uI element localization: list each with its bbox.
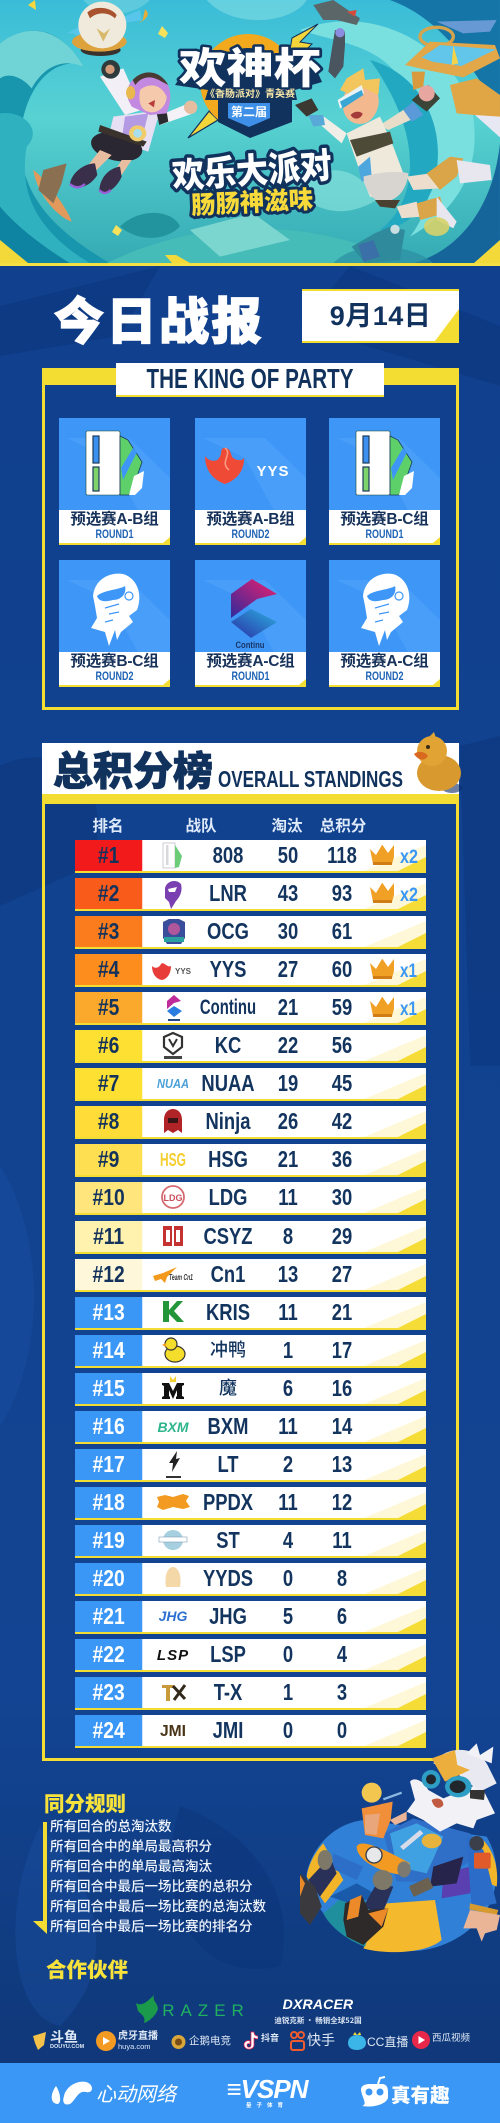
logo: YYDS	[166, 1567, 180, 1587]
sponsor: 西瓜视频: 西瓜视频	[432, 2033, 470, 2044]
row: #6 KC: 22	[278, 1032, 298, 1058]
row: #9 HSG: HSG	[208, 1146, 248, 1172]
logo: LNR	[165, 881, 182, 909]
row: #9 HSG: 21	[278, 1146, 298, 1172]
sponsor: 抖音	[244, 2032, 279, 2050]
logo: CSYZ	[163, 1226, 183, 1246]
card: 预选赛A-C组 round2	[329, 560, 440, 687]
row: #23 T-X: #23	[93, 1679, 125, 1705]
row: #3 OCG	[75, 916, 426, 949]
logo: tournament emblem: 欢神杯	[179, 35, 321, 96]
logo: tournament emblem: 第二届	[231, 103, 267, 120]
row: #21 JHG	[75, 1601, 426, 1634]
panel: overall standings frame	[42, 794, 459, 1761]
row: #13 KRIS	[75, 1297, 426, 1330]
logo: KC	[162, 1032, 184, 1059]
footer band	[0, 2063, 500, 2123]
row: #7 NUAA	[75, 1068, 426, 1101]
logo: NUAA: NUAA	[157, 1076, 189, 1091]
crown x2	[370, 883, 418, 906]
row: #2 LNR: 43	[278, 880, 298, 906]
card: 预选赛B-C组 round1: ROUND1	[366, 529, 403, 541]
logo: 真有趣	[358, 2076, 452, 2110]
row: #11 CSYZ: 29	[332, 1223, 352, 1249]
row: #8 Ninja: 42	[332, 1108, 352, 1134]
card: 预选赛A-C组 round1: ROUND1	[232, 671, 269, 683]
crown x2: x2	[400, 885, 418, 906]
icon: rubber duck	[414, 732, 462, 793]
row: #4 YYS	[75, 954, 426, 987]
row: #9 HSG	[75, 1144, 426, 1177]
logo: JMI: JMI	[160, 1723, 186, 1740]
row: #15 魔: 6	[283, 1375, 293, 1401]
row: #11 CSYZ	[75, 1221, 426, 1254]
row: #15 魔: 16	[332, 1375, 352, 1401]
heading: 同分规则: 同分规则	[44, 1787, 126, 1817]
sponsor: 抖音: 抖音	[261, 2033, 279, 2043]
row: #11 CSYZ: CSYZ	[203, 1223, 253, 1249]
row: #2 LNR: #2	[98, 880, 119, 906]
card: 预选赛A-B组 round2: ROUND2	[232, 529, 269, 541]
sponsor: 企鹅电竞: 企鹅电竞	[189, 2035, 231, 2047]
row: #4 YYS: 60	[332, 956, 352, 982]
row: #14 冲鸭: 1	[283, 1337, 293, 1363]
row: #10 LDG: LDG	[209, 1184, 247, 1210]
character: distant figure	[352, 225, 405, 263]
row: #3 OCG: OCG	[207, 918, 249, 944]
crown x1	[370, 997, 417, 1020]
row: #10 LDG: #10	[93, 1184, 125, 1210]
rule 5: 所有回合中最后一场比赛的总淘汰数	[50, 1899, 266, 1914]
row: #7 NUAA: #7	[98, 1070, 119, 1096]
row: #16 BXM: 14	[332, 1413, 352, 1439]
row: #9 HSG: #9	[98, 1146, 119, 1172]
row: #15 魔: 魔	[219, 1378, 237, 1398]
rule 6: 所有回合中最后一场比赛的排名分	[50, 1919, 252, 1934]
card: 预选赛B-C组 round2	[59, 560, 170, 687]
card: 预选赛B-C组 round2: ROUND2	[96, 671, 133, 683]
row: #3 OCG: 30	[278, 918, 298, 944]
logo: dxracer	[274, 1996, 362, 2026]
row: #8 Ninja: #8	[98, 1108, 119, 1134]
logo: tournament emblem	[175, 24, 322, 138]
logo: dxracer: 迪锐克斯 · 畅销全球52国	[274, 2015, 362, 2026]
logo: LSP: LSP	[157, 1647, 189, 1664]
card: 预选赛A-B组 round1: 预选赛A-B组	[70, 511, 159, 528]
row: #4 YYS: YYS	[210, 956, 246, 982]
row: #24 JMI: #24	[93, 1717, 125, 1743]
row: #13 KRIS: 11	[278, 1299, 298, 1325]
row: #3 OCG: #3	[98, 918, 119, 944]
column header: 战队: 战队	[185, 818, 216, 835]
standings header band	[42, 743, 459, 794]
icon: down arrow	[33, 1822, 47, 1934]
panel: the king of party	[42, 368, 459, 710]
character: top flying figure	[313, 0, 360, 78]
row: #20 YYDS: 8	[337, 1565, 347, 1591]
row: #2 LNR: LNR	[209, 880, 247, 906]
crown x2: x2	[400, 847, 418, 868]
row: #3 OCG: 61	[332, 918, 352, 944]
row: #14 冲鸭: 冲鸭	[210, 1340, 246, 1360]
sponsor: 快手	[290, 2031, 335, 2051]
card: 预选赛A-B组 round2: 预选赛A-B组	[206, 511, 295, 528]
row: #17 LT: 2	[283, 1451, 293, 1477]
row: #23 T-X: 3	[337, 1679, 347, 1705]
row: #15 魔: #15	[93, 1375, 125, 1401]
heading: 今日战报: 今日战报	[54, 282, 264, 354]
sponsor: 快手: 快手	[307, 2032, 335, 2048]
character: elder on swim ring	[300, 1743, 500, 1952]
crown x2	[370, 845, 418, 868]
sponsor: 斗鱼: DOUYU.COM	[50, 2044, 84, 2050]
row: #4 YYS: #4	[98, 956, 119, 982]
row: #1 808: #1	[98, 842, 119, 868]
row: #1 808: 50	[278, 842, 298, 868]
character: purple-haired girl	[70, 60, 197, 193]
row: #20 YYDS: YYDS	[203, 1565, 253, 1591]
row: #20 YYDS: #20	[93, 1565, 125, 1591]
row: #18 PPDX: 12	[332, 1489, 352, 1515]
column header: 总积分: 总积分	[320, 818, 366, 835]
row: #11 CSYZ: #11	[93, 1223, 124, 1249]
card: 预选赛A-C组 round2: 预选赛A-C组	[340, 653, 429, 670]
rule 2: 所有回合中的单局最高积分	[50, 1839, 212, 1854]
card: 预选赛A-B组 round1: ROUND1	[96, 529, 133, 541]
logo: Continu	[167, 995, 182, 1021]
slogan: 欢乐大派对	[170, 137, 333, 200]
date box	[302, 289, 459, 343]
row: #10 LDG	[75, 1182, 426, 1215]
card: 预选赛B-C组 round1: 预选赛B-C组	[340, 511, 429, 528]
logo: 心动网络: 心动网络	[96, 2078, 176, 2107]
logo: VSPN: 量子体育	[246, 2101, 288, 2109]
sponsor: 斗鱼: 斗鱼	[50, 2029, 78, 2045]
row: #17 LT: 13	[332, 1451, 352, 1477]
row: #6 KC: 56	[332, 1032, 352, 1058]
row: #8 Ninja: 26	[278, 1108, 298, 1134]
row: #23 T-X: 1	[283, 1679, 293, 1705]
sponsor: CC直播	[347, 2031, 401, 2051]
row: #14 冲鸭: #14	[93, 1337, 125, 1363]
row: #17 LT: #17	[93, 1451, 125, 1477]
logo: VSPN: ≡VSPN	[226, 2074, 307, 2104]
logo: T-X	[162, 1684, 186, 1701]
card: 预选赛A-C组 round1: 预选赛A-C组	[206, 653, 295, 670]
row: #5 Continu: #5	[98, 994, 119, 1020]
logo: M	[162, 1376, 184, 1399]
row: #13 KRIS: #13	[93, 1299, 125, 1325]
logo: KRIS	[163, 1301, 184, 1322]
logo: LDG: LDG	[164, 1193, 182, 1203]
crown x1	[370, 959, 417, 982]
heading: 合作伙伴: 合作伙伴	[46, 1953, 128, 1983]
row: #23 T-X	[75, 1677, 426, 1710]
row: #16 BXM: #16	[93, 1413, 125, 1439]
row: #15 魔	[75, 1373, 426, 1406]
row: #23 T-X: T-X	[214, 1679, 242, 1705]
row: #5 Continu: 59	[332, 994, 352, 1020]
row: #1 808: 118	[327, 842, 357, 868]
crown x1: x1	[400, 999, 417, 1020]
row: #22 LSP: #22	[93, 1641, 125, 1667]
logo: LDG	[161, 1185, 185, 1209]
row: #13 KRIS: KRIS	[206, 1299, 250, 1325]
sponsor: 西瓜视频	[412, 2031, 470, 2051]
row: #2 LNR: 93	[332, 880, 352, 906]
logo: Cn1	[153, 1267, 193, 1283]
row: #12 Cn1: 13	[278, 1261, 298, 1287]
sponsor: 虎牙直播	[96, 2030, 158, 2051]
crown x1: x1	[400, 961, 417, 982]
character: surfer on left wave	[33, 163, 72, 222]
row: #8 Ninja	[75, 1106, 426, 1139]
row: #11 CSYZ: 8	[283, 1223, 293, 1249]
logo: YYS	[152, 963, 192, 980]
sponsor: 企鹅电竞	[172, 2035, 231, 2049]
card: 预选赛A-B组 round2	[195, 418, 306, 545]
row: #17 LT: LT	[217, 1451, 239, 1477]
logo: dxracer: DXRACER	[283, 1996, 353, 2012]
sponsor: 斗鱼	[33, 2029, 84, 2050]
row: #14 冲鸭	[75, 1335, 426, 1368]
row: #6 KC: KC	[215, 1032, 241, 1058]
column header: 淘汰: 淘汰	[271, 818, 302, 835]
rule 3: 所有回合中的单局最高淘汰	[50, 1859, 212, 1874]
row: #21 JHG: 5	[283, 1603, 293, 1629]
row: #10 LDG: 30	[332, 1184, 352, 1210]
row: #4 YYS: 27	[278, 956, 298, 982]
logo: JHG: JHG	[159, 1608, 187, 1624]
row: #24 JMI: 0	[337, 1717, 347, 1743]
slogan: 肠肠神滋味	[190, 180, 314, 222]
row: #12 Cn1: #12	[93, 1261, 125, 1287]
column header: 排名: 排名	[92, 818, 124, 835]
logo: 心动网络	[50, 2078, 176, 2108]
row: #16 BXM: 11	[278, 1413, 298, 1439]
row: #10 LDG: 11	[278, 1184, 298, 1210]
row: #22 LSP: 0	[283, 1641, 293, 1667]
row: #18 PPDX: PPDX	[203, 1489, 253, 1515]
row: #1 808	[75, 840, 426, 873]
card: 预选赛A-C组 round1	[195, 560, 306, 687]
row: #9 HSG: 36	[332, 1146, 352, 1172]
logo: Ninja	[164, 1109, 182, 1133]
slogan	[170, 137, 333, 222]
row: #22 LSP	[75, 1639, 426, 1672]
row: #19 ST: #19	[93, 1527, 125, 1553]
logo: razer: RAZER	[162, 2001, 250, 2020]
logo: 808	[162, 842, 182, 868]
logo: LT	[166, 1451, 181, 1478]
row: #12 Cn1: Cn1	[211, 1261, 245, 1287]
row: #16 BXM	[75, 1411, 426, 1444]
row: #22 LSP: LSP	[210, 1641, 246, 1667]
row: #6 KC	[75, 1030, 426, 1063]
row: #2 LNR	[75, 878, 426, 911]
sponsor: 虎牙直播: huya.com	[118, 2042, 151, 2051]
row: #7 NUAA: NUAA	[201, 1070, 255, 1096]
row: #20 YYDS	[75, 1563, 426, 1596]
row: #20 YYDS: 0	[283, 1565, 293, 1591]
logo: razer	[136, 1995, 250, 2023]
row: #17 LT	[75, 1449, 426, 1482]
row: #21 JHG: #21	[93, 1603, 125, 1629]
row: #19 ST	[75, 1525, 426, 1558]
standings header band: 总积分榜	[53, 739, 213, 797]
row: #7 NUAA: 19	[278, 1070, 298, 1096]
logo: BXM: BXM	[157, 1419, 189, 1435]
card: 预选赛A-C组 round2: ROUND2	[366, 671, 403, 683]
row: #14 冲鸭: 17	[332, 1337, 352, 1363]
row: #5 Continu: 21	[278, 994, 298, 1020]
row: #5 Continu: Continu	[200, 996, 256, 1019]
banner illustration	[0, 0, 500, 266]
row: #24 JMI: JMI	[213, 1717, 243, 1743]
row: #19 ST: 4	[283, 1527, 293, 1553]
card: 预选赛A-B组 round1	[59, 418, 170, 545]
row: #12 Cn1	[75, 1259, 426, 1292]
row: #12 Cn1: 27	[332, 1261, 352, 1287]
row: #18 PPDX	[75, 1487, 426, 1520]
logo: tournament emblem: 《香肠派对》青英赛	[205, 85, 295, 100]
card: 预选赛A-C组 round1: Continu	[236, 640, 265, 651]
logo: 真有趣: 真有趣	[391, 2079, 450, 2108]
sponsor: CC直播: CC直播	[367, 2035, 408, 2049]
flakes	[112, 26, 168, 236]
rule 4: 所有回合中最后一场比赛的总积分	[50, 1879, 252, 1894]
card: 预选赛B-C组 round2: 预选赛B-C组	[70, 653, 159, 670]
row: #16 BXM: BXM	[208, 1413, 248, 1439]
row: #22 LSP: 4	[337, 1641, 347, 1667]
date box: 9月14日	[330, 301, 431, 331]
row: #8 Ninja: Ninja	[206, 1108, 250, 1134]
row: #6 KC: #6	[98, 1032, 119, 1058]
card: 预选赛B-C组 round1	[329, 418, 440, 545]
row: #24 JMI	[75, 1715, 426, 1748]
icon: flying egg	[67, 2, 148, 56]
row: #19 ST: 11	[332, 1527, 352, 1553]
logo: ST	[158, 1530, 188, 1550]
logo: PPDX	[157, 1494, 190, 1510]
row: #18 PPDX: #18	[93, 1489, 125, 1515]
row: #19 ST: ST	[216, 1527, 240, 1553]
row: #1 808: 808	[213, 842, 243, 868]
character: golden-haired man with shield	[295, 20, 500, 236]
row: #21 JHG: 6	[337, 1603, 347, 1629]
row: #21 JHG: JHG	[209, 1603, 247, 1629]
row: #13 KRIS: 21	[332, 1299, 352, 1325]
card: 预选赛A-B组 round2: YYS	[256, 463, 290, 480]
logo: YYS: YYS	[175, 967, 192, 976]
row: #5 Continu	[75, 992, 426, 1025]
sponsor: 虎牙直播: 虎牙直播	[118, 2031, 158, 2042]
row: #24 JMI: 0	[283, 1717, 293, 1743]
row: #18 PPDX: 11	[278, 1489, 298, 1515]
logo: OCG	[163, 919, 185, 944]
row: #7 NUAA: 45	[332, 1070, 352, 1096]
waves	[0, 0, 500, 263]
logo: duck	[162, 1337, 186, 1363]
rule 1: 所有回合的总淘汰数	[50, 1819, 172, 1834]
